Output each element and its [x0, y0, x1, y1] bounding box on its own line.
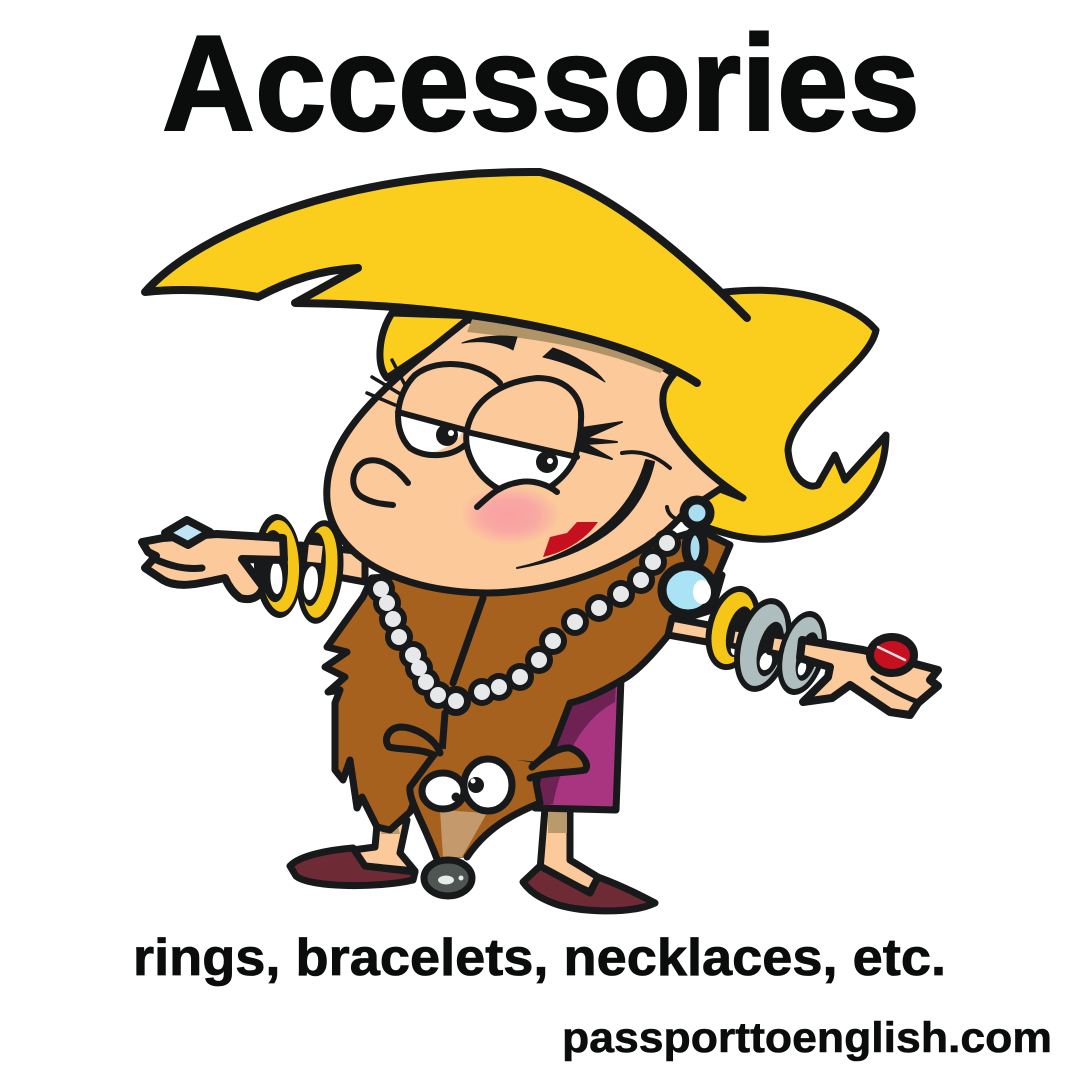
forearm segment one [730, 628, 765, 653]
under-eye line [477, 482, 557, 507]
coat [325, 530, 730, 830]
right upper arm [668, 618, 735, 647]
cheek line [622, 452, 670, 468]
left leg and shoe [290, 820, 415, 886]
left eye [367, 360, 500, 455]
coat centre seam [442, 598, 483, 752]
face [327, 320, 743, 593]
pearl necklace [367, 529, 681, 716]
earring [662, 500, 714, 614]
forearm segment two [769, 635, 805, 658]
back hair [620, 290, 886, 539]
title: Accessories [162, 7, 920, 159]
lips [543, 522, 598, 557]
left hand finger line [152, 558, 202, 569]
hair fringe outline [145, 172, 747, 383]
necklace bead outlines [367, 529, 681, 716]
left hair tuft [380, 313, 480, 378]
illustration: cartoon woman wearing accessories [142, 172, 938, 911]
silver bangle middle [724, 592, 802, 698]
smile [517, 460, 654, 568]
subtitle: rings, bracelets, necklaces, etc. [133, 929, 946, 987]
ear hook [667, 507, 682, 520]
silver bangle outer [769, 606, 835, 700]
left arm inner gold bracelet [252, 513, 304, 619]
fox head [386, 727, 587, 896]
cheek blush [460, 485, 560, 545]
website credit: passporttoenglish.com [562, 1014, 1052, 1062]
nose [353, 460, 408, 505]
hair fringe fill [145, 172, 747, 383]
left arm outer gold bracelet [292, 518, 348, 626]
fox left ear [386, 727, 440, 755]
necklace pearls [373, 535, 675, 709]
left hand and forearm [142, 534, 284, 599]
left arm back stub [300, 545, 365, 582]
right hand finger line [873, 678, 918, 702]
fox right ear [530, 748, 587, 778]
right eye [466, 378, 622, 488]
ring highlight [878, 647, 905, 660]
right hand red ring [870, 637, 914, 673]
forehead shadow [467, 300, 680, 373]
eyebrows [462, 336, 605, 382]
left hand gem ring [165, 520, 210, 545]
right leg and shoe [523, 808, 655, 911]
yellow bangle on right arm [697, 580, 769, 676]
right hand [800, 640, 938, 715]
purple skirt [535, 678, 621, 810]
